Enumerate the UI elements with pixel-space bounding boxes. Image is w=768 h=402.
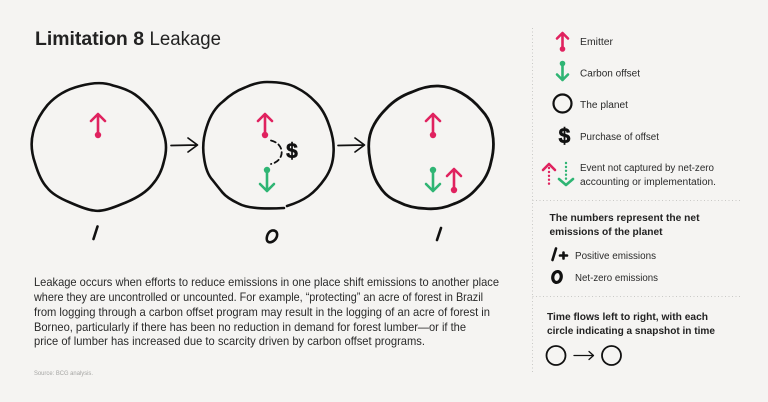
legend: positive emissions: Positive emissions: [575, 251, 656, 262]
title: Limitation 8: [35, 28, 144, 50]
legend: carbon offset: [557, 61, 640, 80]
panel: legend: [543, 33, 716, 365]
body text: [33, 275, 499, 348]
legend: emitter: Emitter: [580, 37, 614, 48]
circle 1: planet with one emitter: [32, 83, 166, 211]
title: Leakage: [150, 28, 221, 50]
legend heading: numbers: The numbers represent the net: [550, 213, 700, 224]
legend: net-zero emissions: [552, 271, 658, 284]
title: [35, 28, 221, 50]
carbon offset arrow 2: [260, 167, 274, 191]
legend: the planet: The planet: [580, 100, 628, 111]
legend heading: time flow: Time flows left to right, with each: [547, 312, 708, 323]
legend: event not captured: accounting or implementation.: [580, 177, 716, 188]
body text: price of lumber has increased due to scarcity driven by carbon offset programs.: [34, 334, 425, 348]
legend: emitter: [557, 33, 614, 52]
legend: purchase of offset: [559, 125, 659, 148]
legend heading: numbers: [550, 213, 700, 238]
circle 3: planet with emitter, offset and leaked emitter: [369, 86, 493, 209]
legend: event not captured: [543, 163, 716, 188]
body text: from logging through a carbon offset program may result in the logging of an acre of forest in: [34, 305, 490, 319]
legend: positive emissions: [552, 248, 656, 262]
source note: Source: BCG analysis.: [34, 370, 93, 377]
circle 2: planet with emitter, offset and purchase: [203, 82, 334, 208]
emitter arrow 3: [426, 114, 440, 138]
emitter arrow 2: [258, 114, 272, 138]
number 1 under circle 3: [437, 228, 441, 240]
panel: diagram of three planet snapshots: [32, 82, 493, 242]
planet outline 3: [369, 86, 493, 209]
legend: carbon offset: Carbon offset: [580, 68, 640, 80]
legend heading: time flow: circle indicating a snapshot in time: [547, 326, 715, 337]
body text: where they are uncontrolled or uncounted. For example, “protecting” an acre of forest in Brazil: [33, 290, 483, 304]
arrow between circle 1 and 2: [171, 138, 198, 152]
number 0 under circle 2: [267, 230, 277, 242]
number 1 under circle 1: [94, 226, 98, 239]
body text: Leakage occurs when efforts to reduce emissions in one place shift emissions to another place: [34, 275, 499, 289]
legend: event not captured: Event not captured by net-zero: [580, 163, 714, 174]
legend heading: time flow: [547, 312, 715, 337]
legend: the planet: [554, 94, 628, 112]
leaked emitter arrow: [447, 169, 461, 193]
dashed purchase link: [271, 140, 282, 164]
legend: net-zero emissions: Net-zero emissions: [575, 273, 658, 284]
planet outline 2: [203, 82, 334, 208]
emitter arrow 1: [91, 114, 105, 138]
legend dividers: [532, 28, 741, 372]
arrow between circle 2 and 3: [338, 138, 364, 152]
legend: purchase of offset: $: [559, 125, 571, 148]
planet outline 1: [32, 83, 166, 211]
carbon offset arrow 3: [426, 167, 440, 191]
icon: dollar sign: $: [286, 140, 298, 163]
legend heading: numbers: emissions of the planet: [550, 227, 663, 238]
legend: time flow diagram: [546, 346, 621, 365]
legend: purchase of offset: Purchase of offset: [580, 132, 659, 143]
body text: Borneo, particularly if there has been no reduction in demand for forest lumber—or if the: [34, 320, 466, 334]
